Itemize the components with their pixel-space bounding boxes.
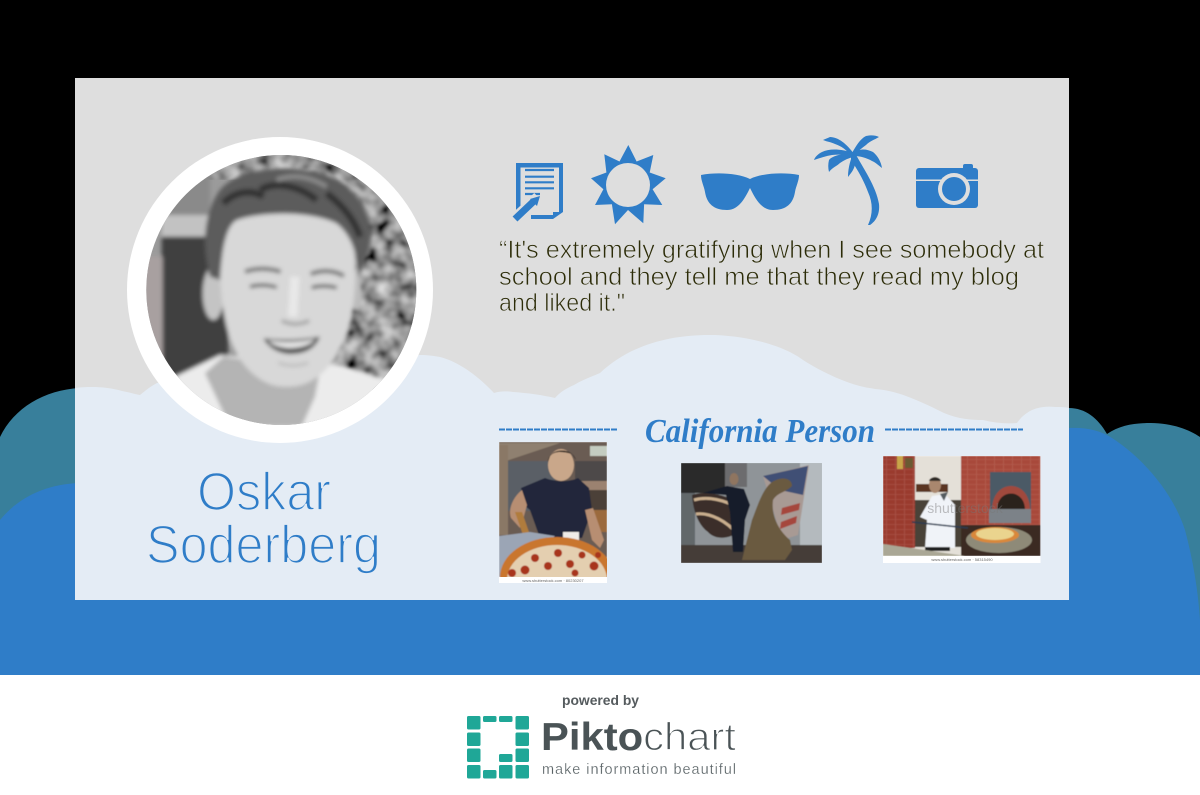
icon: document and pencil	[513, 163, 563, 220]
quote text: school and they tell me that they read my blog	[499, 263, 1019, 291]
name: Oskar Soderberg: Soderberg	[146, 515, 381, 575]
photo: chef at brick oven: www.shutterstock.com · 58315490	[931, 557, 993, 562]
blue front clouds and ground band	[0, 428, 1200, 675]
quote text: and liked it."	[499, 289, 625, 317]
name: Oskar Soderberg: Oskar	[197, 462, 331, 522]
photo: chef at brick oven: shutterstock	[927, 500, 1004, 516]
light cloud on card	[75, 335, 1069, 600]
icon: sunglasses	[701, 173, 799, 210]
teal back clouds	[0, 388, 1200, 640]
photo: president riding a raptor	[681, 463, 822, 563]
portrait photo	[143, 150, 420, 430]
photo: chef at brick oven	[883, 456, 1040, 563]
logo: tagline: make information beautiful	[542, 762, 736, 778]
portrait: white ring with photo	[127, 137, 433, 443]
panel: gray card	[75, 78, 1069, 600]
icon: palm tree	[814, 135, 882, 225]
quote text	[499, 236, 1044, 317]
logo: Piktochart wordmark: Piktochart	[541, 716, 736, 759]
logo: Piktochart mark	[467, 716, 529, 778]
icon row	[513, 135, 978, 225]
powered by label: powered by	[562, 693, 640, 708]
name: Oskar Soderberg	[146, 462, 381, 575]
quote text: “It's extremely gratifying when I see somebody at	[499, 236, 1044, 264]
icon: sun	[591, 145, 666, 224]
footer: white band	[0, 675, 1200, 795]
photo: pizza maker with pizza	[499, 442, 607, 583]
photo: pizza maker with pizza: www.shutterstock.com · 80230207	[522, 578, 584, 583]
icon: camera	[916, 164, 978, 208]
heading: California Person with dashed rules: California Person	[645, 413, 875, 450]
